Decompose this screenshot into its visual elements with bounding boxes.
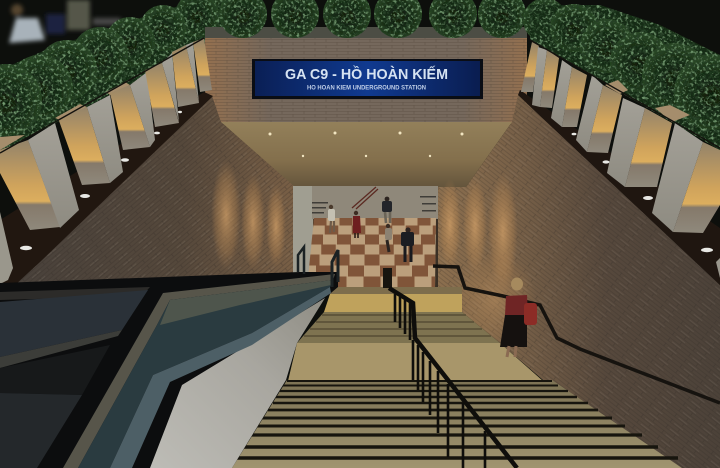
person in dark top	[382, 197, 392, 223]
far opening back area	[294, 186, 438, 290]
person in light shirt	[328, 205, 335, 233]
woman in red top	[500, 278, 537, 357]
sign title: GA C9 - HỒ HOÀN KIẾM	[285, 65, 448, 83]
lower escalator steps	[0, 393, 82, 468]
left planter floor strip	[0, 92, 213, 285]
blurred pedestrians at street level	[9, 0, 121, 43]
person in red dress	[353, 211, 361, 238]
upper escalator top strip	[0, 287, 150, 300]
far pillar	[293, 186, 313, 276]
escalator step shadows	[0, 345, 110, 395]
upper escalator grey rail	[0, 330, 122, 368]
escalator left white side wall	[150, 298, 325, 468]
mid steps	[297, 312, 500, 343]
far map wall	[312, 186, 438, 219]
far escalator handrails	[298, 247, 338, 287]
escalator black base	[0, 272, 338, 468]
escalator upper glass reflection	[160, 280, 333, 325]
centre stair railing	[383, 268, 517, 468]
lit upper landing	[308, 287, 462, 312]
sign subtitle: HO HOAN KIEM UNDERGROUND STATION	[307, 86, 426, 92]
back brick wall	[205, 38, 527, 124]
ceiling	[221, 122, 512, 187]
planter floor lights	[20, 111, 713, 252]
right planters	[521, 40, 720, 278]
station sign	[252, 59, 483, 99]
right planter floor strip	[518, 90, 720, 285]
ceiling downlights	[268, 132, 464, 157]
escalator bronze edge	[63, 274, 335, 468]
checkered far floor	[308, 218, 436, 287]
shrubs: left row	[0, 0, 247, 152]
shrubs: back row	[219, 0, 567, 42]
left planters	[0, 38, 212, 284]
main stairs	[232, 380, 682, 468]
escalator teal glass	[78, 280, 333, 468]
right wall handrail	[433, 266, 720, 403]
shrubs: right row	[530, 4, 720, 150]
back planter ledge shadow	[205, 27, 527, 38]
left brick wall	[10, 96, 298, 290]
person in grey top	[385, 224, 392, 252]
lower landing	[288, 343, 543, 381]
person in black suit	[401, 227, 414, 262]
escalator blue balustrade band	[110, 287, 331, 468]
right brick wall	[436, 95, 720, 468]
upper escalator glass panel	[0, 290, 148, 357]
